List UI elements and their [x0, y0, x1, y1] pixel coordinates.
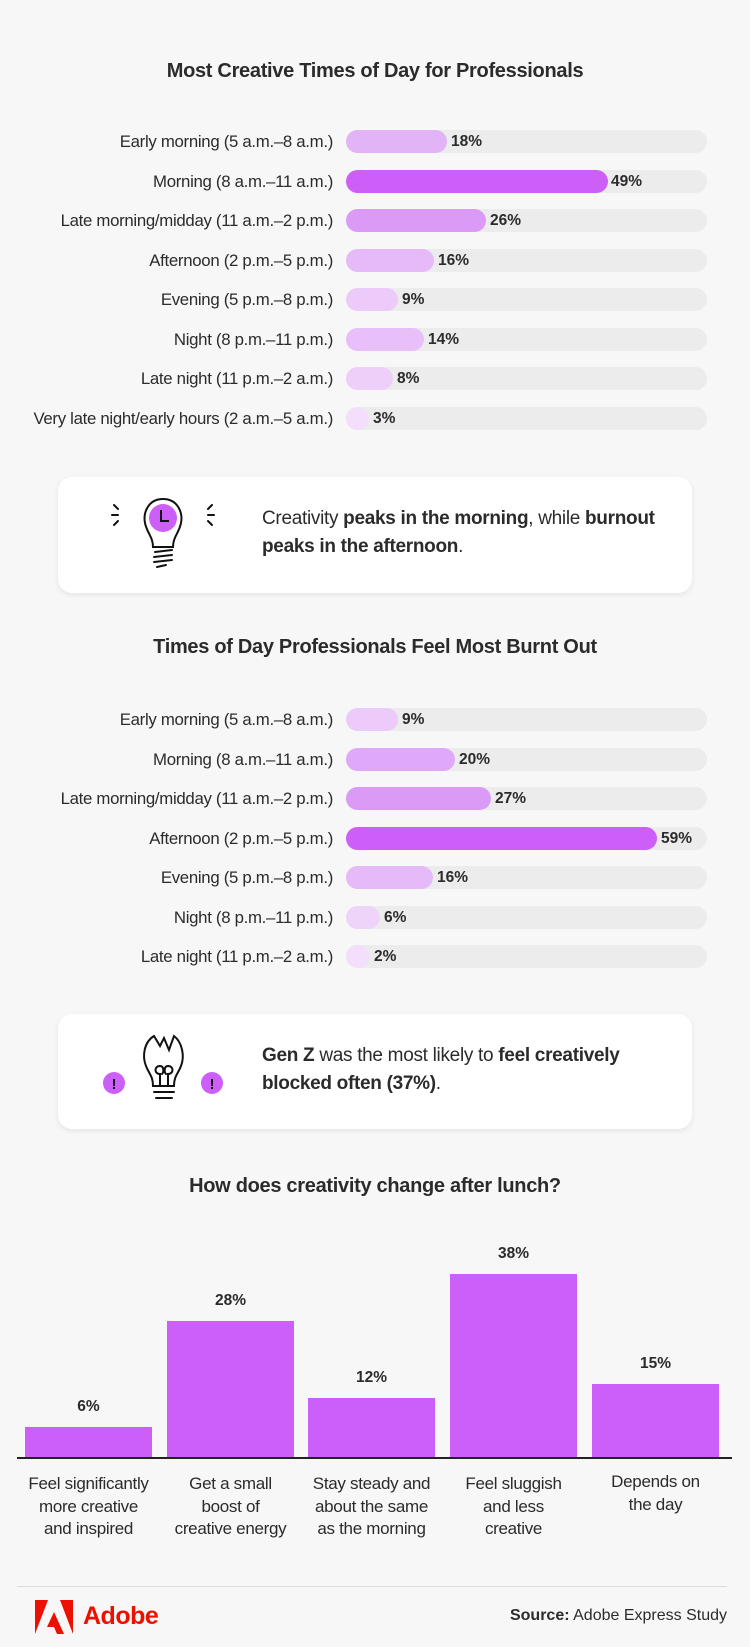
- chart: burnout times: [61, 708, 707, 968]
- category labels: Feel significantly: [28, 1474, 149, 1493]
- callout text: blocked often (37%).: [262, 1073, 441, 1094]
- chart: creative times: Late morning/midday (11 a.m.–2 p.m.): [61, 211, 333, 230]
- chart: burnout times: Early morning (5 a.m.–8 a.m.): [120, 710, 333, 729]
- chart: burnout times: 9%: [402, 711, 424, 728]
- chart: creative times: Morning (8 a.m.–11 a.m.): [153, 172, 333, 190]
- category labels: Stay steady and: [313, 1474, 430, 1493]
- callout text: [262, 1045, 620, 1094]
- chart: creative times: Afternoon (2 p.m.–5 p.m.): [149, 250, 333, 270]
- category labels: creative: [485, 1519, 542, 1538]
- icon: broken lightbulb with exclamations: !: [112, 1076, 116, 1093]
- category labels: Feel sluggish: [465, 1474, 562, 1493]
- source: Source: Adobe Express Study: [510, 1607, 727, 1624]
- logo: Adobe: Adobe: [83, 1602, 158, 1630]
- chart: creative times: Late night (11 p.m.–2 a.m.): [141, 369, 333, 388]
- callout text: peaks in the afternoon.: [262, 536, 463, 557]
- chart: after lunch column chart: [17, 1245, 732, 1459]
- chart: after lunch column chart: 38%: [498, 1245, 529, 1262]
- chart: creative times: Evening (5 p.m.–8 p.m.): [161, 290, 333, 309]
- category labels: Depends on: [611, 1472, 700, 1491]
- category labels: creative energy: [175, 1519, 286, 1538]
- chart: burnout times: 2%: [374, 948, 396, 965]
- logo: Adobe: [35, 1600, 158, 1634]
- chart: creative times: [33, 130, 707, 430]
- chart: after lunch column chart: 15%: [640, 1355, 671, 1372]
- chart: burnout times: 59%: [661, 830, 692, 846]
- chart: burnout times: 27%: [495, 790, 526, 807]
- chart: after lunch column chart: 12%: [356, 1369, 387, 1386]
- chart: burnout times: Night (8 p.m.–11 p.m.): [174, 908, 333, 926]
- chart: burnout times: Morning (8 a.m.–11 a.m.): [153, 750, 333, 768]
- category labels: [28, 1472, 700, 1538]
- callout text: [262, 508, 655, 557]
- chart: burnout times: Evening (5 p.m.–8 p.m.): [161, 868, 333, 887]
- chart: creative times: Night (8 p.m.–11 p.m.): [174, 330, 333, 348]
- icon: lightbulb with clock: [111, 498, 215, 568]
- category labels: and less: [483, 1496, 544, 1516]
- chart: creative times: 26%: [490, 212, 521, 229]
- chart: creative times: Very late night/early hours (2 a.m.–5 a.m.): [33, 408, 333, 428]
- category labels: Get a small: [189, 1474, 272, 1493]
- chart: creative times: 3%: [373, 410, 395, 426]
- icon: broken lightbulb with exclamations: [103, 1034, 223, 1099]
- chart: burnout times: 16%: [437, 869, 468, 886]
- chart: burnout times: Late morning/midday (11 a.m.–2 p.m.): [61, 789, 333, 808]
- title: after lunch: How does creativity change after lunch?: [189, 1175, 561, 1197]
- category labels: boost of: [201, 1496, 260, 1516]
- title: creative times: Most Creative Times of Day for Professionals: [167, 60, 583, 82]
- category labels: as the morning: [317, 1519, 426, 1538]
- chart: after lunch column chart: 6%: [77, 1398, 100, 1415]
- chart: creative times: 49%: [611, 172, 642, 190]
- chart: creative times: 14%: [428, 330, 459, 348]
- chart: creative times: Early morning (5 a.m.–8 a.m.): [120, 132, 333, 151]
- chart: creative times: 8%: [397, 370, 419, 387]
- chart: burnout times: Afternoon (2 p.m.–5 p.m.): [149, 828, 333, 848]
- callout: creativity peaks: [58, 477, 692, 593]
- category labels: the day: [629, 1494, 682, 1514]
- category labels: about the same: [315, 1496, 428, 1516]
- chart: creative times: 18%: [451, 133, 482, 150]
- icon: broken lightbulb with exclamations: !: [210, 1076, 214, 1093]
- callout text: Creativity peaks in the morning, while burnout: [262, 508, 655, 529]
- callout: Gen Z blocked: [58, 1014, 692, 1129]
- category labels: more creative: [39, 1496, 138, 1516]
- category labels: and inspired: [44, 1519, 133, 1538]
- chart: burnout times: Late night (11 p.m.–2 a.m.): [141, 947, 333, 966]
- chart: creative times: 9%: [402, 291, 424, 308]
- title: burnout times: Times of Day Professionals Feel Most Burnt Out: [153, 636, 597, 658]
- callout text: Gen Z was the most likely to feel creatively: [262, 1045, 619, 1066]
- chart: creative times: 16%: [438, 252, 469, 268]
- chart: burnout times: 20%: [459, 750, 490, 768]
- chart: burnout times: 6%: [384, 908, 406, 926]
- chart: after lunch column chart: 28%: [215, 1292, 246, 1309]
